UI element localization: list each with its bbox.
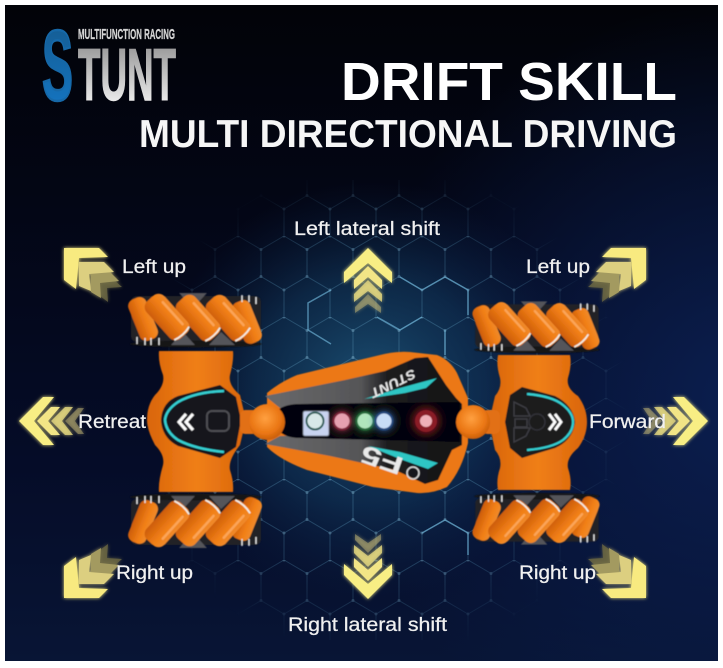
car body shell	[249, 352, 490, 493]
arrow: right lateral shift	[344, 534, 392, 599]
arrow: left lateral shift	[344, 248, 392, 313]
bottom dark panel	[265, 432, 462, 484]
arrow: retreat	[19, 397, 84, 445]
lit LED window	[303, 411, 329, 436]
axle connectors	[240, 410, 500, 434]
shoulder joints	[249, 404, 285, 440]
label: left lateral shift: Left lateral shift	[294, 218, 441, 240]
left bottom wheel	[126, 494, 264, 551]
top dark panel	[265, 357, 462, 414]
right top wheel	[470, 299, 602, 353]
arrow: lower right right up	[588, 544, 646, 598]
model lettering: STUNT	[368, 366, 418, 401]
label: left up (right): Left up	[526, 256, 590, 278]
label: right up (right): Right up	[519, 562, 596, 584]
right hub	[489, 355, 587, 490]
arrow: right-side left up	[588, 248, 646, 302]
subtitle: MULTI DIRECTIONAL DRIVING	[139, 113, 677, 156]
title: DRIFT SKILL	[341, 52, 677, 112]
logo: STUNT multifunction racing: TUNT	[78, 35, 176, 116]
car body shell: F5	[357, 439, 407, 480]
logo: STUNT multifunction racing: MULTIFUNCTION RACING	[78, 26, 175, 43]
label: right lateral shift: Right lateral shift	[288, 614, 448, 636]
LED lights	[306, 406, 441, 436]
logo: STUNT multifunction racing: S	[42, 10, 73, 122]
arrow: left up	[64, 248, 122, 302]
arrow: lower left right up	[64, 544, 122, 598]
left top wheel	[126, 290, 264, 348]
right bottom wheel	[470, 493, 602, 547]
label: left up (left): Left up	[122, 256, 186, 278]
stunt car	[126, 290, 602, 551]
label: retreat: Retreat	[78, 411, 147, 433]
center black channel	[278, 402, 460, 442]
label: right up (left): Right up	[116, 562, 193, 584]
arrow: forward	[643, 397, 708, 445]
cyan stripes	[364, 378, 437, 399]
logo: STUNT multifunction racing	[42, 10, 176, 122]
left hub	[147, 351, 246, 492]
label: forward: Forward	[589, 411, 666, 433]
